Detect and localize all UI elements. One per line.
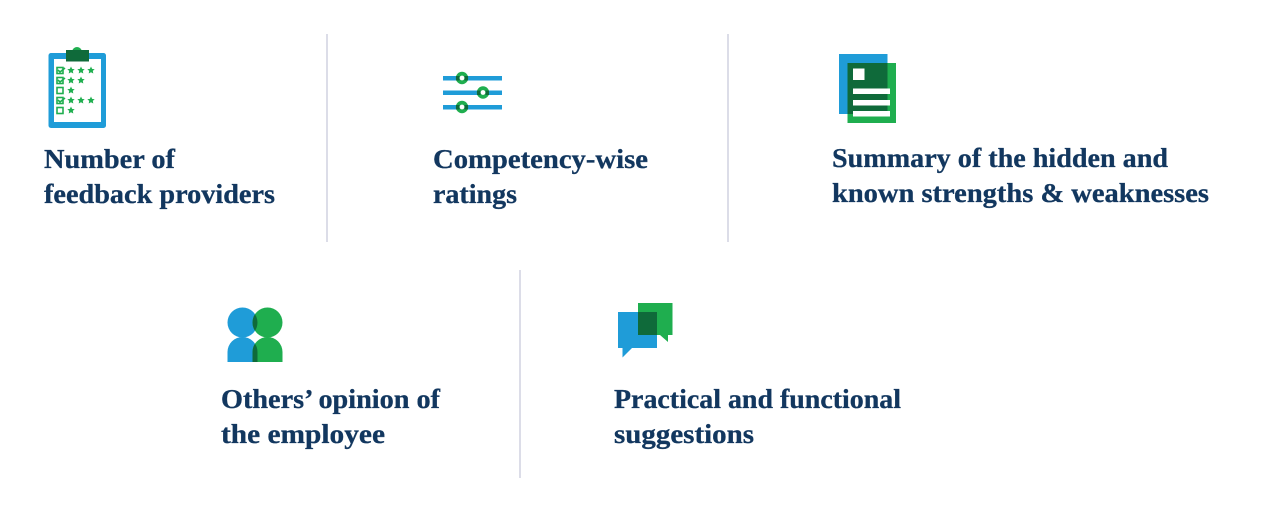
panel: summary of strengths and weaknesses: [832, 54, 1209, 208]
heading: competency-wise ratings: ratings: [433, 179, 517, 209]
icon: clipboard with star ratings: [48, 47, 106, 128]
icon: sliders: [443, 74, 502, 111]
heading: others' opinion of the employee: the employee: [221, 419, 385, 449]
heading: competency-wise ratings: Competency-wise: [433, 144, 648, 174]
heading: others' opinion of the employee: [221, 384, 441, 449]
heading: summary of strengths and weaknesses: [832, 143, 1209, 208]
heading: others' opinion of the employee: Others’ opinion of: [221, 384, 441, 414]
heading: number of feedback providers: [44, 144, 275, 209]
heading: number of feedback providers: Number of: [44, 144, 176, 174]
panel: practical suggestions: [614, 303, 902, 449]
panel: competency-wise ratings: [433, 74, 648, 209]
panel: others' opinion: [221, 308, 441, 449]
heading: competency-wise ratings: [433, 144, 648, 209]
panel: number of feedback providers: [44, 47, 275, 209]
heading: number of feedback providers: feedback providers: [44, 179, 275, 209]
heading: practical and functional suggestions: Practical and functional: [614, 384, 902, 414]
heading: practical and functional suggestions: suggestions: [614, 419, 754, 449]
heading: summary of strengths and weaknesses: Summary of the hidden and: [832, 143, 1168, 173]
heading: summary of strengths and weaknesses: known strengths & weaknesses: [832, 178, 1209, 208]
icon: speech bubbles: [618, 303, 672, 358]
icon: two people: [228, 308, 282, 362]
icon: overlapping documents: [839, 54, 896, 123]
heading: practical and functional suggestions: [614, 384, 902, 449]
